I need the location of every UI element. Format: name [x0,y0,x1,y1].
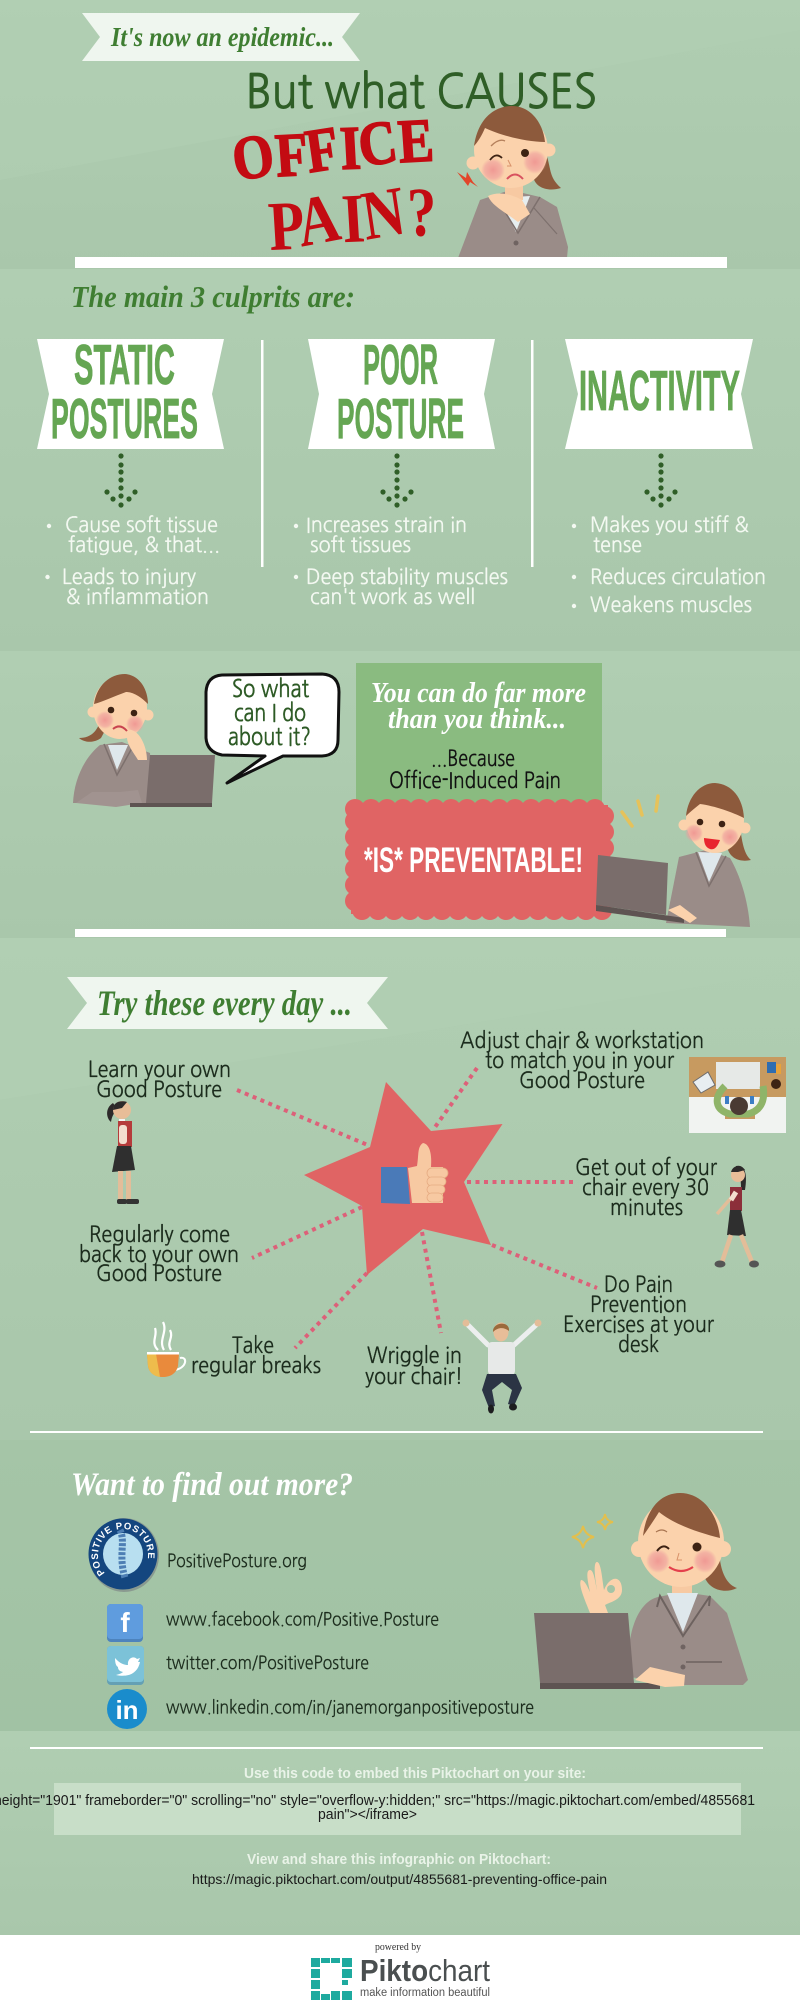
tip: pain prevention exercises: Do Pain [604,1274,673,1296]
illustration: worried woman at laptop [73,674,215,807]
tip: adjust chair: Good Posture [519,1070,645,1092]
icon: linkedin [107,1689,147,1729]
tip: take breaks [191,1335,321,1377]
heading: want to find out more: Want to find out more? [71,1467,353,1503]
column: poor posture: POSTURE [337,387,464,451]
link: linkedin: www.linkedin.com/in/janemorganpositiveposture [166,1698,534,1718]
column: static postures [37,333,224,608]
tip: get out of chair [575,1157,717,1219]
green callout: You can do far more [371,677,586,709]
tip: pain prevention exercises: Prevention [590,1294,687,1316]
column: static postures: Cause soft tissue [65,515,218,536]
link: twitter: twitter.com/PositivePosture [166,1654,369,1672]
column: poor posture [294,333,508,608]
speech bubble: So what [232,677,309,701]
tip: wriggle: Wriggle in [367,1345,462,1367]
banner: try these every day: Try these every day ... [97,983,352,1023]
logo: positive posture: POSITIVE POSTURE [91,1522,155,1576]
logo mark [311,1958,352,2000]
illustration: woman with neck pain [457,106,568,258]
column: static postures: POSTURES [51,387,198,451]
illustration: happy woman at laptop [596,783,751,927]
icon: walking woman [714,1166,759,1268]
tip: adjust chair [460,1030,704,1092]
link: website: PositivePosture.org [167,1552,307,1570]
heading: but what causes: But what CAUSES [246,68,597,115]
tip: get out of chair: minutes [610,1197,683,1219]
tip: adjust chair: Adjust chair & workstation [460,1030,704,1053]
tip: adjust chair: to match you in your [485,1050,674,1072]
embed label: Use this code to embed this Piktochart on your site: [244,1765,586,1782]
dashed connectors [237,1068,597,1348]
icon: thumbs up [381,1143,448,1204]
banner: epidemic [82,13,360,61]
banner: try these every day [67,977,388,1029]
tip: take breaks: Take [232,1335,274,1357]
panel: embed code [0,1747,763,1887]
icon: facebook [107,1604,143,1642]
tip: come back to posture: Good Posture [96,1263,222,1285]
green callout: than you think... [388,703,566,735]
column: poor posture: Increases strain in [306,515,467,536]
green callout: Office-Induced Pain [389,770,561,792]
heading: the main 3 culprits: The main 3 culprits are: [71,279,355,314]
link: facebook: www.facebook.com/Positive.Posture [166,1610,439,1628]
white divider [30,1747,763,1749]
speech bubble: can I do [234,701,306,725]
divider [531,340,534,567]
powered by: powered by [375,1942,421,1953]
heading: office pain [227,102,444,268]
embed code box: height="1901" frameborder="0" scrolling="no" style="overflow-y:hidden;" src="https://magic.piktochart.com/embed/4855681 [0,1792,755,1809]
share url: https://magic.piktochart.com/output/4855681-preventing-office-pain [192,1871,607,1887]
banner: epidemic: It's now an epidemic... [110,22,334,52]
white bar [75,257,727,268]
illustration: winking woman with ok sign [534,1493,748,1689]
speech bubble: about it? [228,725,311,749]
panel: find out more [71,1467,748,1729]
column: inactivity: Reduces circulation [590,567,766,588]
icon: tea cup [147,1322,185,1377]
tip: pain prevention exercises: Exercises at your [563,1314,714,1336]
white bar [75,929,726,937]
icon: twitter [107,1646,144,1685]
tip: wriggle [365,1345,463,1388]
heading: office pain: PAIN? [262,168,444,268]
embed code box [0,1783,755,1835]
column: inactivity [565,339,766,616]
panel: header [75,13,727,268]
red scalloped callout [351,805,608,914]
column: poor posture: can't work as well [310,587,475,608]
icon: facebook: f [120,1607,130,1638]
green callout [356,663,602,807]
speech bubble [206,674,339,783]
tip: get out of chair: chair every 30 [582,1177,709,1199]
column: static postures: Leads to injury [62,567,196,589]
column: static postures: fatigue, & that... [68,535,220,556]
white divider [30,1431,763,1433]
icon: workstation from above [689,1057,786,1133]
tip: pain prevention exercises [563,1274,714,1356]
tip: learn posture: Learn your own [88,1059,231,1081]
column: inactivity: Weakens muscles [590,595,752,616]
column: poor posture: soft tissues [310,535,411,556]
tip: pain prevention exercises: desk [618,1334,659,1356]
share label: View and share this infographic on Piktochart: [247,1851,551,1868]
icon: linkedin: in [115,1695,139,1725]
divider [261,340,264,567]
embed code box: pain"></iframe> [318,1806,417,1823]
tagline: make information beautiful [360,1987,490,1999]
column: poor posture: POOR [363,333,438,397]
logo wordmark: Piktochart [360,1953,490,1988]
column: static postures: STATIC [74,333,175,397]
panel: daily tips [30,977,786,1433]
tip: learn posture [88,1059,231,1101]
heading: office pain: OFFICE [227,102,439,197]
panel: preventable [73,663,751,937]
red star [304,1082,502,1275]
green callout: ...Because [431,748,515,770]
tip: come back to posture: back to your own [79,1244,239,1266]
column: poor posture: Deep stability muscles [306,567,508,588]
tip: learn posture: Good Posture [96,1079,222,1101]
column: inactivity: Makes you stiff & [590,515,749,536]
footer: powered by piktochart [311,1942,490,2000]
icon: wriggling man [462,1320,542,1414]
tip: come back to posture: Regularly come [89,1224,230,1246]
tip: take breaks: regular breaks [191,1355,321,1377]
tip: wriggle: your chair! [365,1366,463,1388]
icon: standing woman [107,1101,139,1204]
column: static postures: & inflammation [66,587,209,608]
tip: get out of chair: Get out of your [575,1157,717,1179]
tip: come back to posture [79,1224,239,1285]
panel: culprits [37,279,766,616]
column: inactivity: tense [593,535,642,556]
red scalloped callout: *IS* PREVENTABLE! [364,841,583,880]
